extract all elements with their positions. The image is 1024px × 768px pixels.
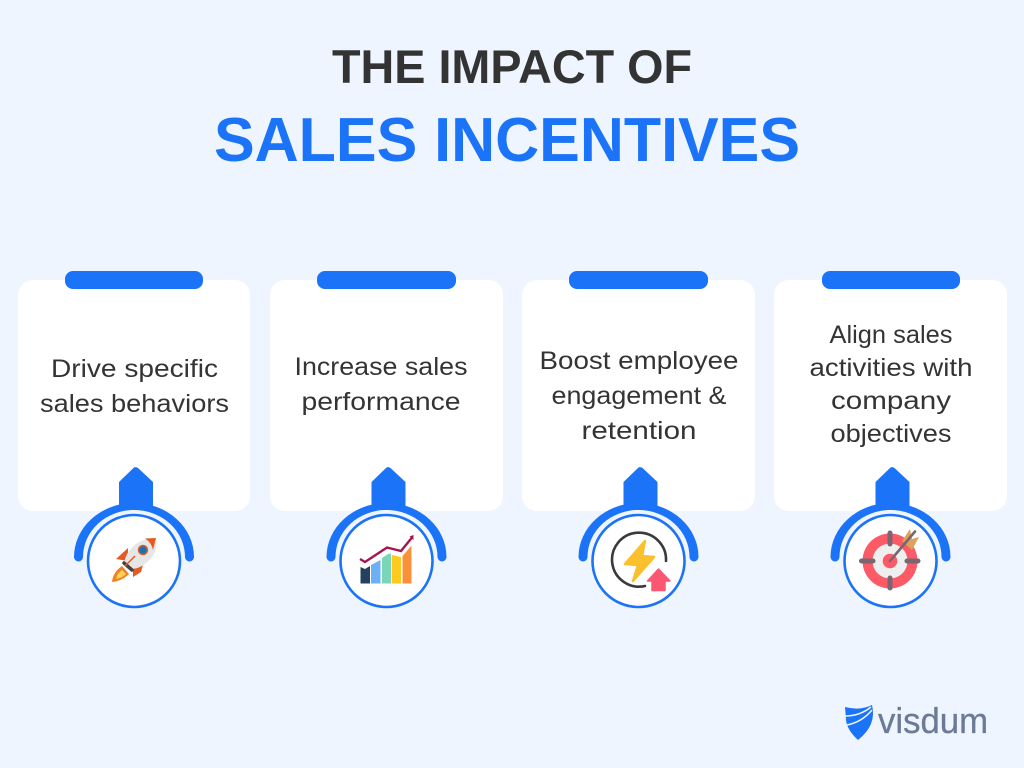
- card background: [18, 280, 250, 511]
- card text: company: [831, 387, 952, 415]
- card text: objectives: [830, 420, 952, 448]
- card text: activities with: [810, 354, 972, 382]
- card text: [540, 347, 738, 445]
- card top bar: [65, 271, 203, 289]
- icon: energy boost: [612, 533, 670, 590]
- heading: sales incentives: SALES INCENTIVES: [214, 106, 800, 175]
- card background: [522, 280, 755, 511]
- connector badge: [326, 467, 446, 607]
- card text: sales behaviors: [40, 390, 229, 418]
- wordmark: visdum: [878, 700, 988, 741]
- connector badge: [578, 467, 698, 607]
- icon: rocket: [112, 533, 162, 582]
- connector badge: [74, 467, 194, 607]
- card text: [294, 353, 468, 416]
- connector badge: [830, 467, 950, 607]
- card text: Drive specific: [51, 355, 218, 383]
- card top bar: [822, 271, 960, 289]
- icon: shield: [845, 705, 873, 740]
- card text: performance: [302, 388, 460, 416]
- icon: bar chart: [360, 535, 414, 584]
- heading: the impact of: THE IMPACT OF: [332, 40, 692, 93]
- panel: align sales activities with company objectives: [774, 271, 1007, 607]
- card background: [270, 280, 503, 511]
- panel: boost employee engagement and retention: [522, 271, 755, 607]
- card top bar: [317, 271, 456, 289]
- card text: Align sales: [830, 321, 952, 349]
- icon: target with arrow: [862, 529, 919, 588]
- card text: [40, 355, 229, 418]
- card background: [774, 280, 1007, 511]
- card text: Boost employee: [540, 347, 738, 375]
- logo: visdum: [845, 700, 988, 741]
- panel: increase sales performance: [270, 271, 503, 607]
- panel: drive specific sales behaviors: [18, 271, 250, 607]
- card top bar: [569, 271, 708, 289]
- card text: retention: [582, 417, 696, 445]
- card text: [810, 321, 972, 448]
- card text: engagement &: [552, 382, 727, 410]
- card text: Increase sales: [294, 353, 468, 381]
- title: [214, 40, 800, 175]
